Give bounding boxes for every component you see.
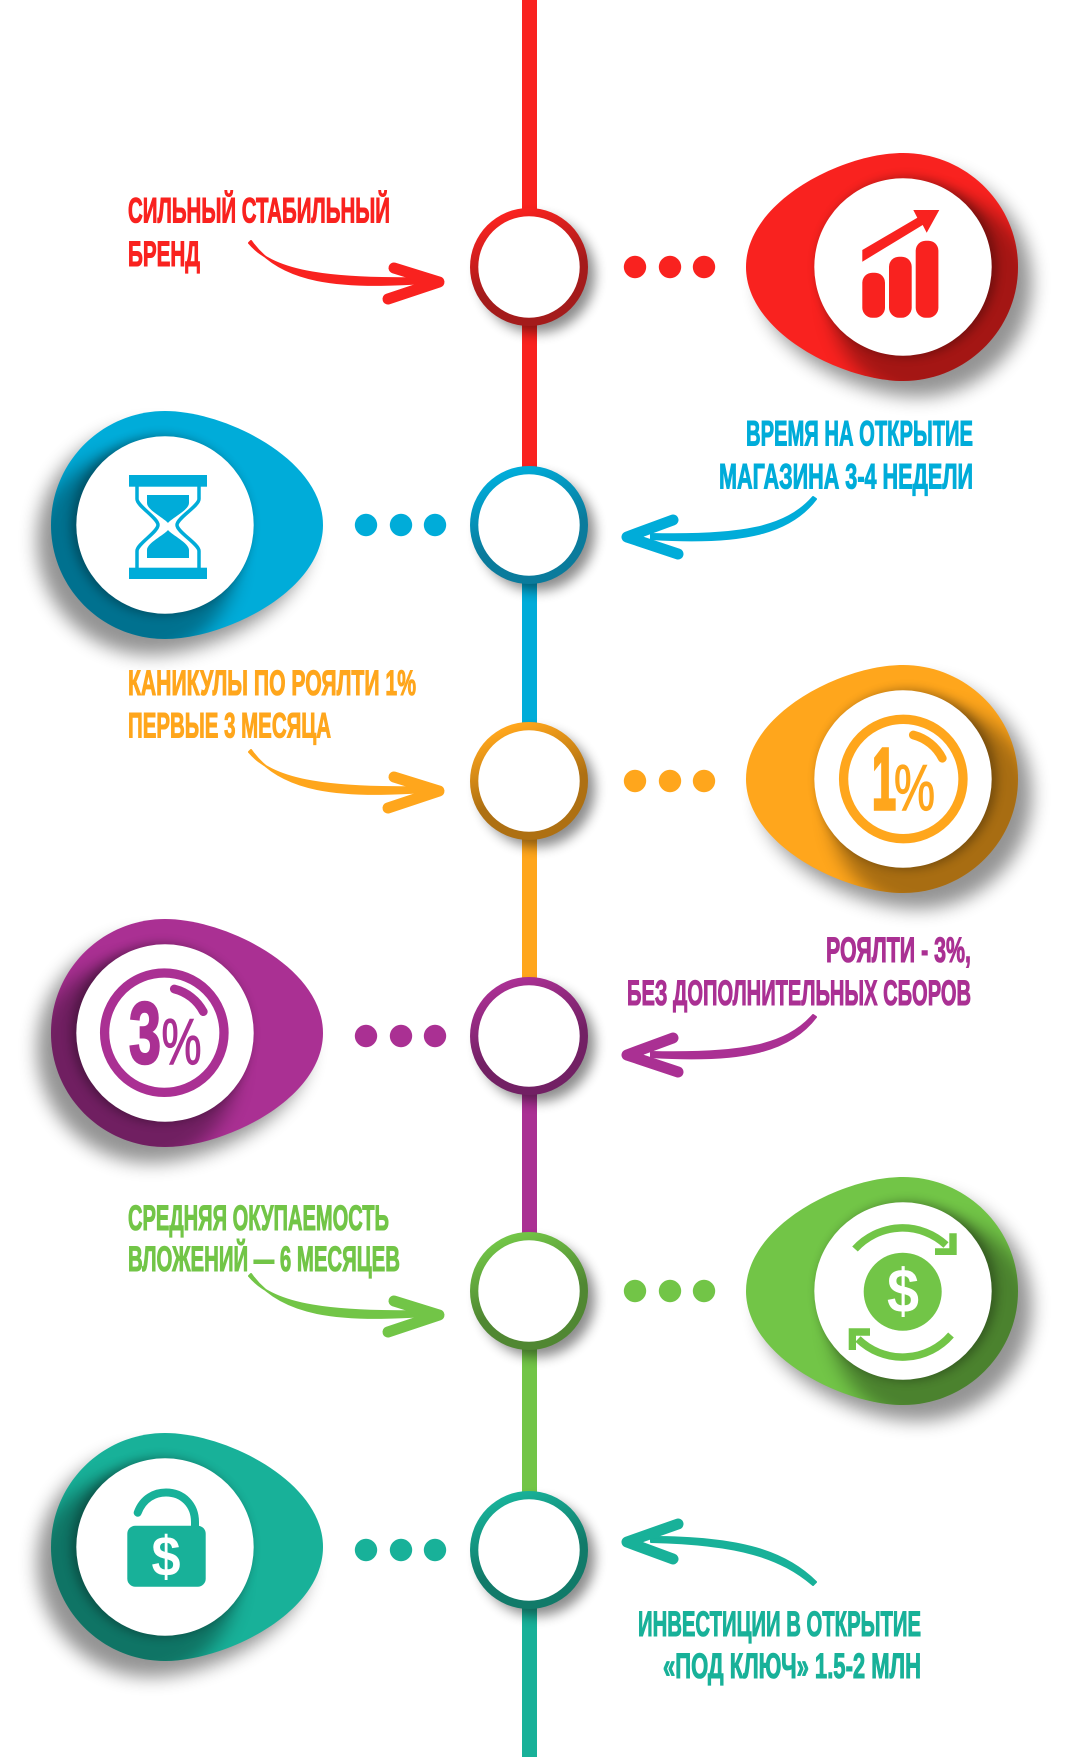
marker: purple	[470, 977, 595, 1102]
text: red label: СИЛЬНЫЙ СТАБИЛЬНЫЙ	[128, 190, 390, 230]
panel: blue egg with hourglass icon	[32, 411, 323, 658]
marker: green	[470, 1232, 595, 1357]
arrow: blue	[627, 497, 816, 554]
arrow: purple	[627, 1015, 816, 1072]
text: teal label	[638, 1605, 921, 1686]
icon: 3 percent	[105, 973, 224, 1092]
icon: 1 percent: %	[894, 751, 935, 824]
panel: red egg with chart icon	[746, 153, 1036, 400]
dots: teal	[355, 1539, 446, 1561]
icon: open lock with dollar	[127, 1492, 206, 1589]
marker: red	[470, 208, 595, 333]
panel: orange egg with 1% icon	[746, 665, 1036, 912]
dots: green	[624, 1280, 715, 1302]
icon: 3 percent: 3	[129, 985, 161, 1082]
arrow: green	[249, 1274, 439, 1332]
icon: 3 percent: %	[162, 1005, 202, 1078]
dots: red	[624, 256, 715, 278]
marker: blue	[470, 466, 595, 591]
text: green label: ВЛОЖЕНИЙ — 6 МЕСЯЦЕВ	[128, 1239, 400, 1279]
arrow: teal	[627, 1524, 816, 1585]
icon: 1 percent: 1	[872, 731, 896, 828]
marker: teal	[470, 1491, 595, 1616]
icon: 1 percent	[844, 719, 963, 839]
text: teal label: «ПОД КЛЮЧ» 1.5-2 МЛН	[663, 1647, 921, 1686]
arrow: red	[249, 241, 439, 299]
text: green label	[128, 1199, 400, 1279]
dots: orange	[624, 770, 715, 792]
icon: hourglass	[129, 475, 207, 579]
marker: orange	[470, 722, 595, 847]
timeline line	[522, 0, 537, 1757]
text: purple label	[627, 931, 971, 1013]
icon: open lock with dollar: $	[152, 1525, 180, 1589]
text: orange label: КАНИКУЛЫ ПО РОЯЛТИ 1%	[128, 664, 416, 703]
panel: purple egg with 3% icon	[32, 919, 323, 1166]
text: orange label: ПЕРВЫЕ 3 МЕСЯЦА	[128, 706, 331, 746]
icon: dollar with cycle arrows: $	[887, 1258, 919, 1326]
panel: green egg with money cycle icon	[746, 1177, 1036, 1424]
dots: blue	[355, 514, 446, 536]
text: blue label	[719, 414, 973, 496]
panel: teal egg with lock icon	[32, 1433, 323, 1680]
text: green label: СРЕДНЯЯ ОКУПАЕМОСТЬ	[128, 1199, 389, 1238]
arrow: orange	[249, 750, 439, 808]
text: red label	[128, 190, 390, 274]
text: orange label	[128, 664, 416, 746]
text: red label: БРЕНД	[128, 235, 200, 274]
text: purple label: РОЯЛТИ - 3%,	[826, 931, 971, 970]
dots: purple	[355, 1025, 446, 1047]
icon: dollar with cycle arrows	[849, 1228, 957, 1357]
icon: growth chart	[862, 210, 939, 318]
